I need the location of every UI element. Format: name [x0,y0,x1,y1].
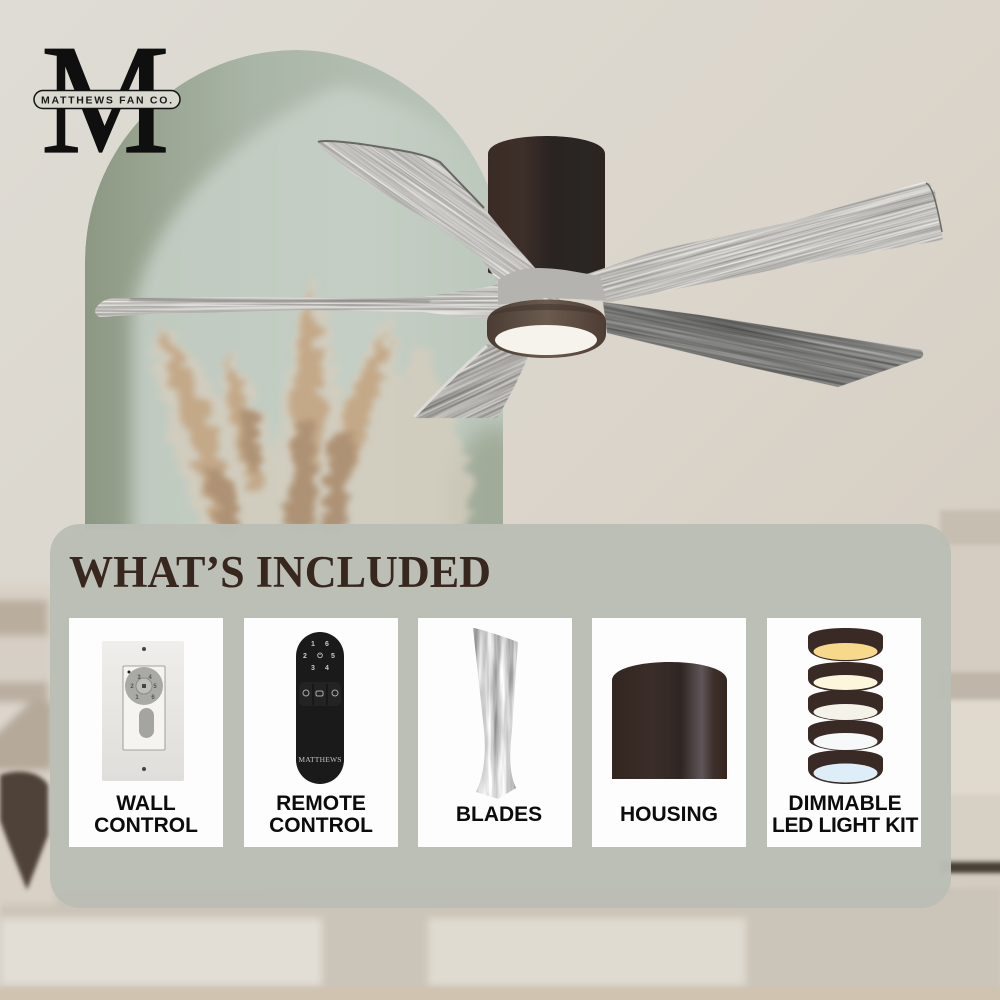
blade: upper left [242,27,635,414]
icon: wall control [102,641,184,781]
icon: housing [612,662,727,779]
blade: upper right [535,88,973,396]
fan housing [488,136,605,276]
label: blades: BLADES [456,803,542,826]
blade edge highlight [414,346,487,417]
blade top edge [318,141,484,208]
icon: remote: 1 [311,641,315,648]
blade tip dark edge [926,183,942,232]
blade: right lower [587,242,939,447]
logo [34,13,180,186]
logo wordmark: MATTHEWS FAN CO. [41,94,172,106]
label: remote control: REMOTE [276,792,366,815]
icon: remote: 2 [303,653,307,660]
icon: wall control: 5 [153,684,157,690]
icon: remote [296,632,344,784]
label: dimmable LED light kit: DIMMABLE [788,792,902,815]
ceiling fan [95,27,973,462]
heading: WHAT’S INCLUDED [69,547,491,597]
label: remote control: CONTROL [269,814,373,837]
icon: remote: 4 [325,665,329,672]
label: wall control: CONTROL [94,814,198,837]
label: dimmable LED light kit: LED LIGHT KIT [772,814,918,837]
icon: wall control: 1 [135,695,139,701]
blade hub [498,268,606,305]
ring shadow [490,304,603,316]
card: blades [418,618,572,847]
blade: front lower [385,300,556,462]
card: remote control [244,618,398,847]
icon: remote: MATTHEWS [298,755,342,764]
dark throw blanket [0,772,48,890]
icon: LED pucks [808,628,883,784]
pampas core [160,282,388,530]
icon: wall control: 2 [130,684,134,690]
left blade dark grain [130,299,430,302]
pampas fluff [156,270,472,530]
pampas grass [156,270,472,530]
sofa at right [940,510,1000,873]
LED lens [495,325,597,355]
icon: wall control: 6 [151,695,155,701]
icon: remote: 3 [311,665,315,672]
blade: left [95,280,515,320]
card: dimmable LED light kit [767,618,921,847]
light ring [487,300,606,358]
logo monogram: M [41,13,169,186]
green arched niche [85,50,503,524]
icon: wall control: 3 [137,675,141,681]
label: wall control: WALL [116,792,176,815]
icon: blade [473,628,518,799]
card: wall control [69,618,223,847]
label: housing: HOUSING [620,803,718,826]
icon: wall control: 4 [148,675,152,681]
icon: remote: 5 [331,653,335,660]
panel: what's included [50,524,951,908]
icon: remote: ⏻ [317,652,323,660]
icon: remote: 6 [325,641,329,648]
cushions and dark throw at left [0,585,55,905]
pampas dark base [206,405,356,530]
card: housing [592,618,746,847]
logo pill [34,90,180,108]
